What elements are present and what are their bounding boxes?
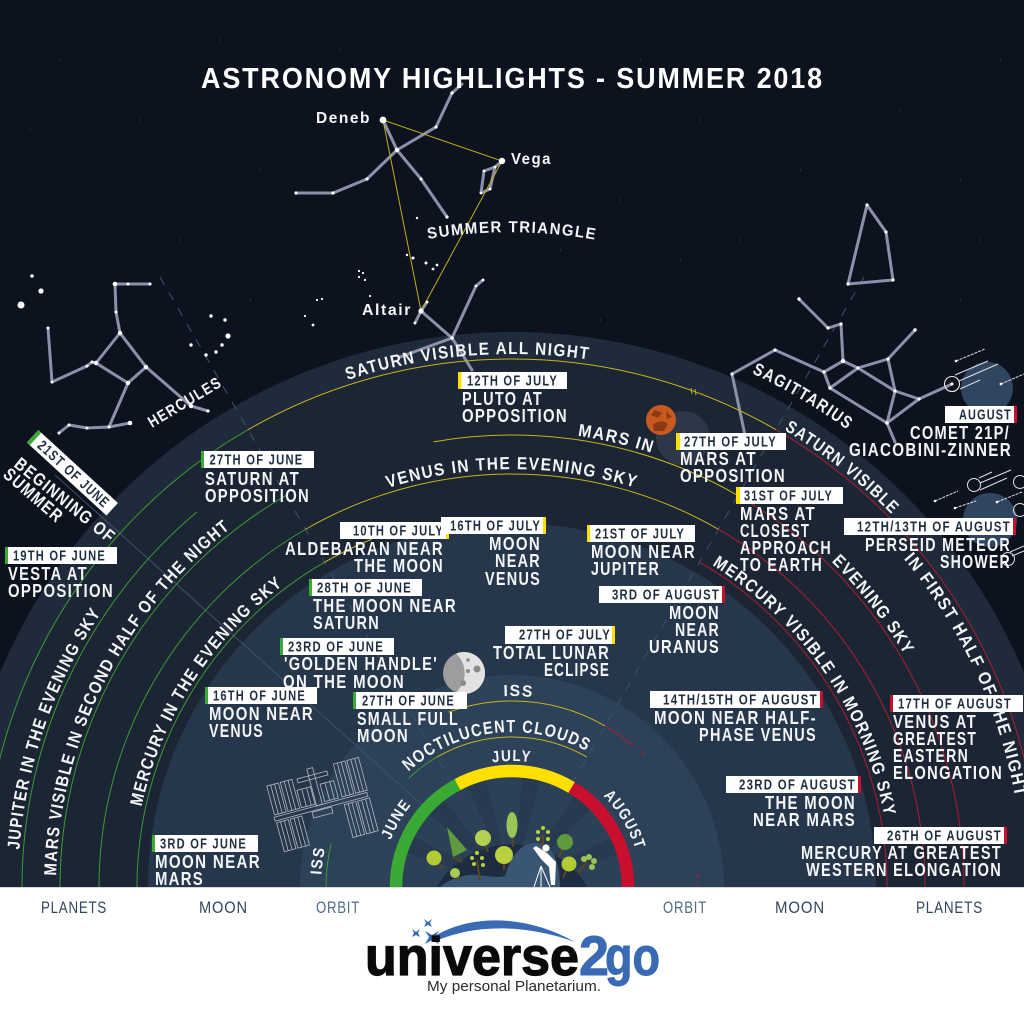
label: 27th of July, Mars	[676, 433, 786, 486]
label: 23rd of June: 23RD OF JUNE	[288, 640, 384, 656]
landscape illustration with trees and stargazer	[426, 812, 597, 888]
label: 31st of July: 31ST OF JULY	[744, 488, 833, 504]
month label: June: JUNE	[382, 799, 410, 840]
footer panel: PLANETS	[916, 898, 983, 917]
label: 27th of July, Mars: 27TH OF JULY	[684, 434, 777, 450]
label: 16th of July: MOON	[489, 534, 541, 554]
arc label: Jupiter in the evening sky: JUPITER IN THE EVENING SKY	[8, 607, 98, 850]
label: 23rd of August: NEAR MARS	[753, 810, 856, 830]
label: 31st of July: MARS AT	[740, 504, 816, 524]
title: ASTRONOMY HIGHLIGHTS - SUMMER 2018	[201, 63, 824, 95]
label: 27th of July, eclipse: TOTAL LUNAR	[493, 643, 610, 663]
label: 16th of June: MOON NEAR	[209, 704, 314, 724]
label: 12th of July: OPPOSITION	[462, 406, 568, 426]
label: 3rd of June	[152, 835, 261, 889]
label: 21st of July: MOON NEAR	[591, 542, 696, 562]
logo: universe2go: 2	[579, 924, 609, 987]
footer panel: MOON	[775, 898, 825, 917]
label: 12th of July: PLUTO AT	[462, 389, 543, 409]
label: 17th of August: ELONGATION	[893, 763, 1003, 783]
label: 16th of July	[441, 517, 546, 589]
label: 19th of June: 19TH OF JUNE	[13, 548, 106, 564]
constellation: Summer Triangle and Cygnus	[294, 82, 596, 372]
label: 23rd of August: 23RD OF AUGUST	[739, 778, 856, 794]
arc label: Mars in: MARS IN	[578, 424, 654, 452]
label: 31st of July: APPROACH	[740, 538, 832, 558]
label: 27th of July, eclipse: 27TH OF JULY	[519, 628, 611, 644]
curved labels on arcs	[8, 342, 1024, 875]
arc label: noctilucent clouds: NOCTILUCENT CLOUDS	[402, 720, 590, 771]
label: 16th of July: VENUS	[485, 569, 541, 589]
logo: universe2go: My personal Planetarium.	[427, 978, 601, 995]
label: 17th of August: EASTERN	[893, 746, 969, 766]
footer panel: PLANETS	[41, 898, 107, 917]
constellation: Summer Triangle and Cygnus: SUMMER TRIANGLE	[428, 221, 596, 240]
orbit arcs: ISS and noctilucent clouds	[326, 701, 699, 887]
label: August comet	[849, 406, 1017, 460]
label: 27th of June, Saturn: SATURN AT	[205, 469, 300, 489]
arc label: ISS left: ISS	[310, 848, 324, 874]
month ring	[396, 771, 628, 887]
label: 21st of June: BEGINNING OF	[10, 454, 119, 547]
arc label: Mars visible in second half of the night: MARS VISIBLE IN SECOND HALF OF THE NIGHT	[44, 519, 228, 875]
label: 21st of June: 21ST OF JUNE	[34, 438, 112, 512]
guide lines	[55, 277, 864, 812]
footer panel: ORBIT	[663, 898, 707, 917]
label: 28th of June: 28TH OF JUNE	[317, 580, 412, 596]
label: 12th/13th of August	[844, 518, 1016, 572]
logo: universe2go: universe	[365, 927, 579, 987]
orbit band	[300, 675, 724, 888]
label: 16th of July: NEAR	[495, 551, 541, 571]
label: 3rd of June: 3RD OF JUNE	[160, 836, 247, 852]
label: 23rd of August: THE MOON	[765, 793, 856, 813]
label: 28th of June	[309, 579, 457, 633]
label: 16th of June: VENUS	[209, 721, 264, 741]
label: 31st of July	[736, 487, 843, 575]
arc label: Saturn visible: SATURN VISIBLE	[786, 421, 900, 514]
label: 28th of June: SATURN	[313, 613, 380, 633]
icon: Mars planet with shadow	[646, 405, 710, 465]
label: 31st of July: CLOSEST	[740, 521, 810, 541]
label: 17th of August: GREATEST	[893, 729, 977, 749]
label: 23rd of June: ON THE MOON	[283, 672, 405, 692]
label: 26th of August	[801, 827, 1007, 880]
label: 19th of June	[5, 547, 117, 601]
label: 27th of June, Saturn: 27TH OF JUNE	[210, 452, 304, 468]
arc label: Saturn visible all night: SATURN VISIBLE ALL NIGHT	[345, 342, 590, 379]
label: 21st of July: JUPITER	[591, 559, 660, 579]
label: 10th of July: 10TH OF JULY	[353, 524, 444, 540]
label: 21st of July	[587, 525, 696, 579]
icon: meteor shower	[934, 470, 1024, 566]
label: 14th/15th of August: 14TH/15TH OF AUGUST	[663, 692, 818, 708]
label: 27th of June, Saturn	[201, 451, 314, 506]
label: 27th of June, small full moon: MOON	[357, 726, 409, 746]
label: 17th of August: VENUS AT	[893, 712, 977, 732]
label: 27th of June, small full moon	[353, 692, 467, 746]
inner disc with rays	[402, 777, 622, 888]
arc label: Venus in the evening sky: VENUS IN THE EVENING SKY	[384, 457, 638, 487]
label: 16th of July: 16TH OF JULY	[450, 518, 541, 534]
label: 19th of June: OPPOSITION	[8, 581, 114, 601]
label: 3rd of June: MOON NEAR	[155, 852, 261, 872]
planet orbit arcs	[0, 359, 1024, 887]
constellation: Summer Triangle and Cygnus: Vega	[511, 151, 552, 168]
label: 12th of July	[458, 372, 568, 426]
label: 21st of July: 21ST OF JULY	[595, 526, 685, 542]
label: 23rd of June	[280, 638, 438, 692]
logo: universe2go: go	[605, 927, 660, 987]
label: 27th of July, Mars: OPPOSITION	[680, 466, 786, 486]
label: 12th of July: 12TH OF JULY	[467, 374, 558, 390]
label: 27th of July, eclipse	[493, 626, 615, 680]
moon band	[148, 523, 876, 888]
icon: comet	[944, 349, 1024, 414]
footer panel	[0, 887, 1024, 1024]
label: 27th of July, eclipse: ECLIPSE	[544, 660, 610, 680]
label: 16th of June: 16TH OF JUNE	[213, 688, 306, 704]
label: 27th of June, small full moon: 27TH OF JUNE	[362, 694, 455, 710]
footer panel: ORBIT	[316, 898, 360, 917]
label: 31st of July: TO EARTH	[740, 555, 823, 575]
label: 27th of June, small full moon: SMALL FULL	[357, 709, 459, 729]
label: 10th of July: ALDEBARAN NEAR	[285, 539, 444, 559]
constellation: Hercules	[18, 274, 231, 434]
label: 3rd of August: NEAR	[675, 620, 720, 640]
constellation: Sagittarius	[730, 203, 952, 442]
label: 16th of June	[205, 687, 317, 741]
footer panel: MOON	[199, 898, 248, 917]
label: 14th/15th of August	[650, 691, 823, 745]
planets outer band	[0, 332, 1024, 888]
month label: August: AUGUST	[604, 791, 646, 846]
arc label: Mercury visible in morning sky: MERCURY VISIBLE IN MORNING SKY	[713, 556, 896, 813]
logo: universe2go	[365, 919, 660, 995]
label: 14th/15th of August: MOON NEAR HALF-	[654, 708, 817, 728]
label: 27th of June, Saturn: OPPOSITION	[205, 486, 310, 506]
label: 3rd of August: 3RD OF AUGUST	[612, 588, 720, 604]
constellation: Hercules: HERCULES	[145, 374, 225, 431]
label: 21st of June: SUMMER	[0, 464, 68, 527]
label: 23rd of June: 'GOLDEN HANDLE'	[284, 654, 438, 674]
arc label: Mercury in the evening sky: MERCURY IN THE EVENING SKY	[130, 576, 280, 806]
label: 23rd of August	[726, 776, 861, 830]
label: 3rd of August: URANUS	[649, 637, 720, 657]
label: 10th of July: THE MOON	[354, 556, 444, 576]
month label: July: JULY	[492, 750, 531, 762]
arc label: evening sky: EVENING SKY	[832, 554, 914, 652]
icon: space station	[264, 755, 378, 856]
label: 3rd of August: MOON	[669, 603, 720, 623]
label: 10th of July	[285, 522, 449, 576]
label: 3rd of June: MARS	[155, 869, 204, 889]
label: 3rd of August	[599, 586, 725, 657]
label: 27th of July, Mars: MARS AT	[680, 449, 757, 469]
arc label: ISS top: ISS	[504, 684, 532, 697]
constellation: Summer Triangle and Cygnus: Deneb	[316, 110, 371, 127]
label: 19th of June: VESTA AT	[8, 564, 88, 584]
label: 14th/15th of August: PHASE VENUS	[699, 725, 817, 745]
planets inner band	[0, 359, 1024, 888]
arc label: Sagittarius: SAGITTARIUS	[753, 364, 852, 428]
constellation: Summer Triangle and Cygnus: Altair	[362, 302, 412, 319]
label: 28th of June: THE MOON NEAR	[313, 596, 457, 616]
label: 21st of June	[0, 430, 119, 547]
label: 17th of August	[890, 695, 1023, 783]
icon: full moon	[443, 652, 485, 694]
